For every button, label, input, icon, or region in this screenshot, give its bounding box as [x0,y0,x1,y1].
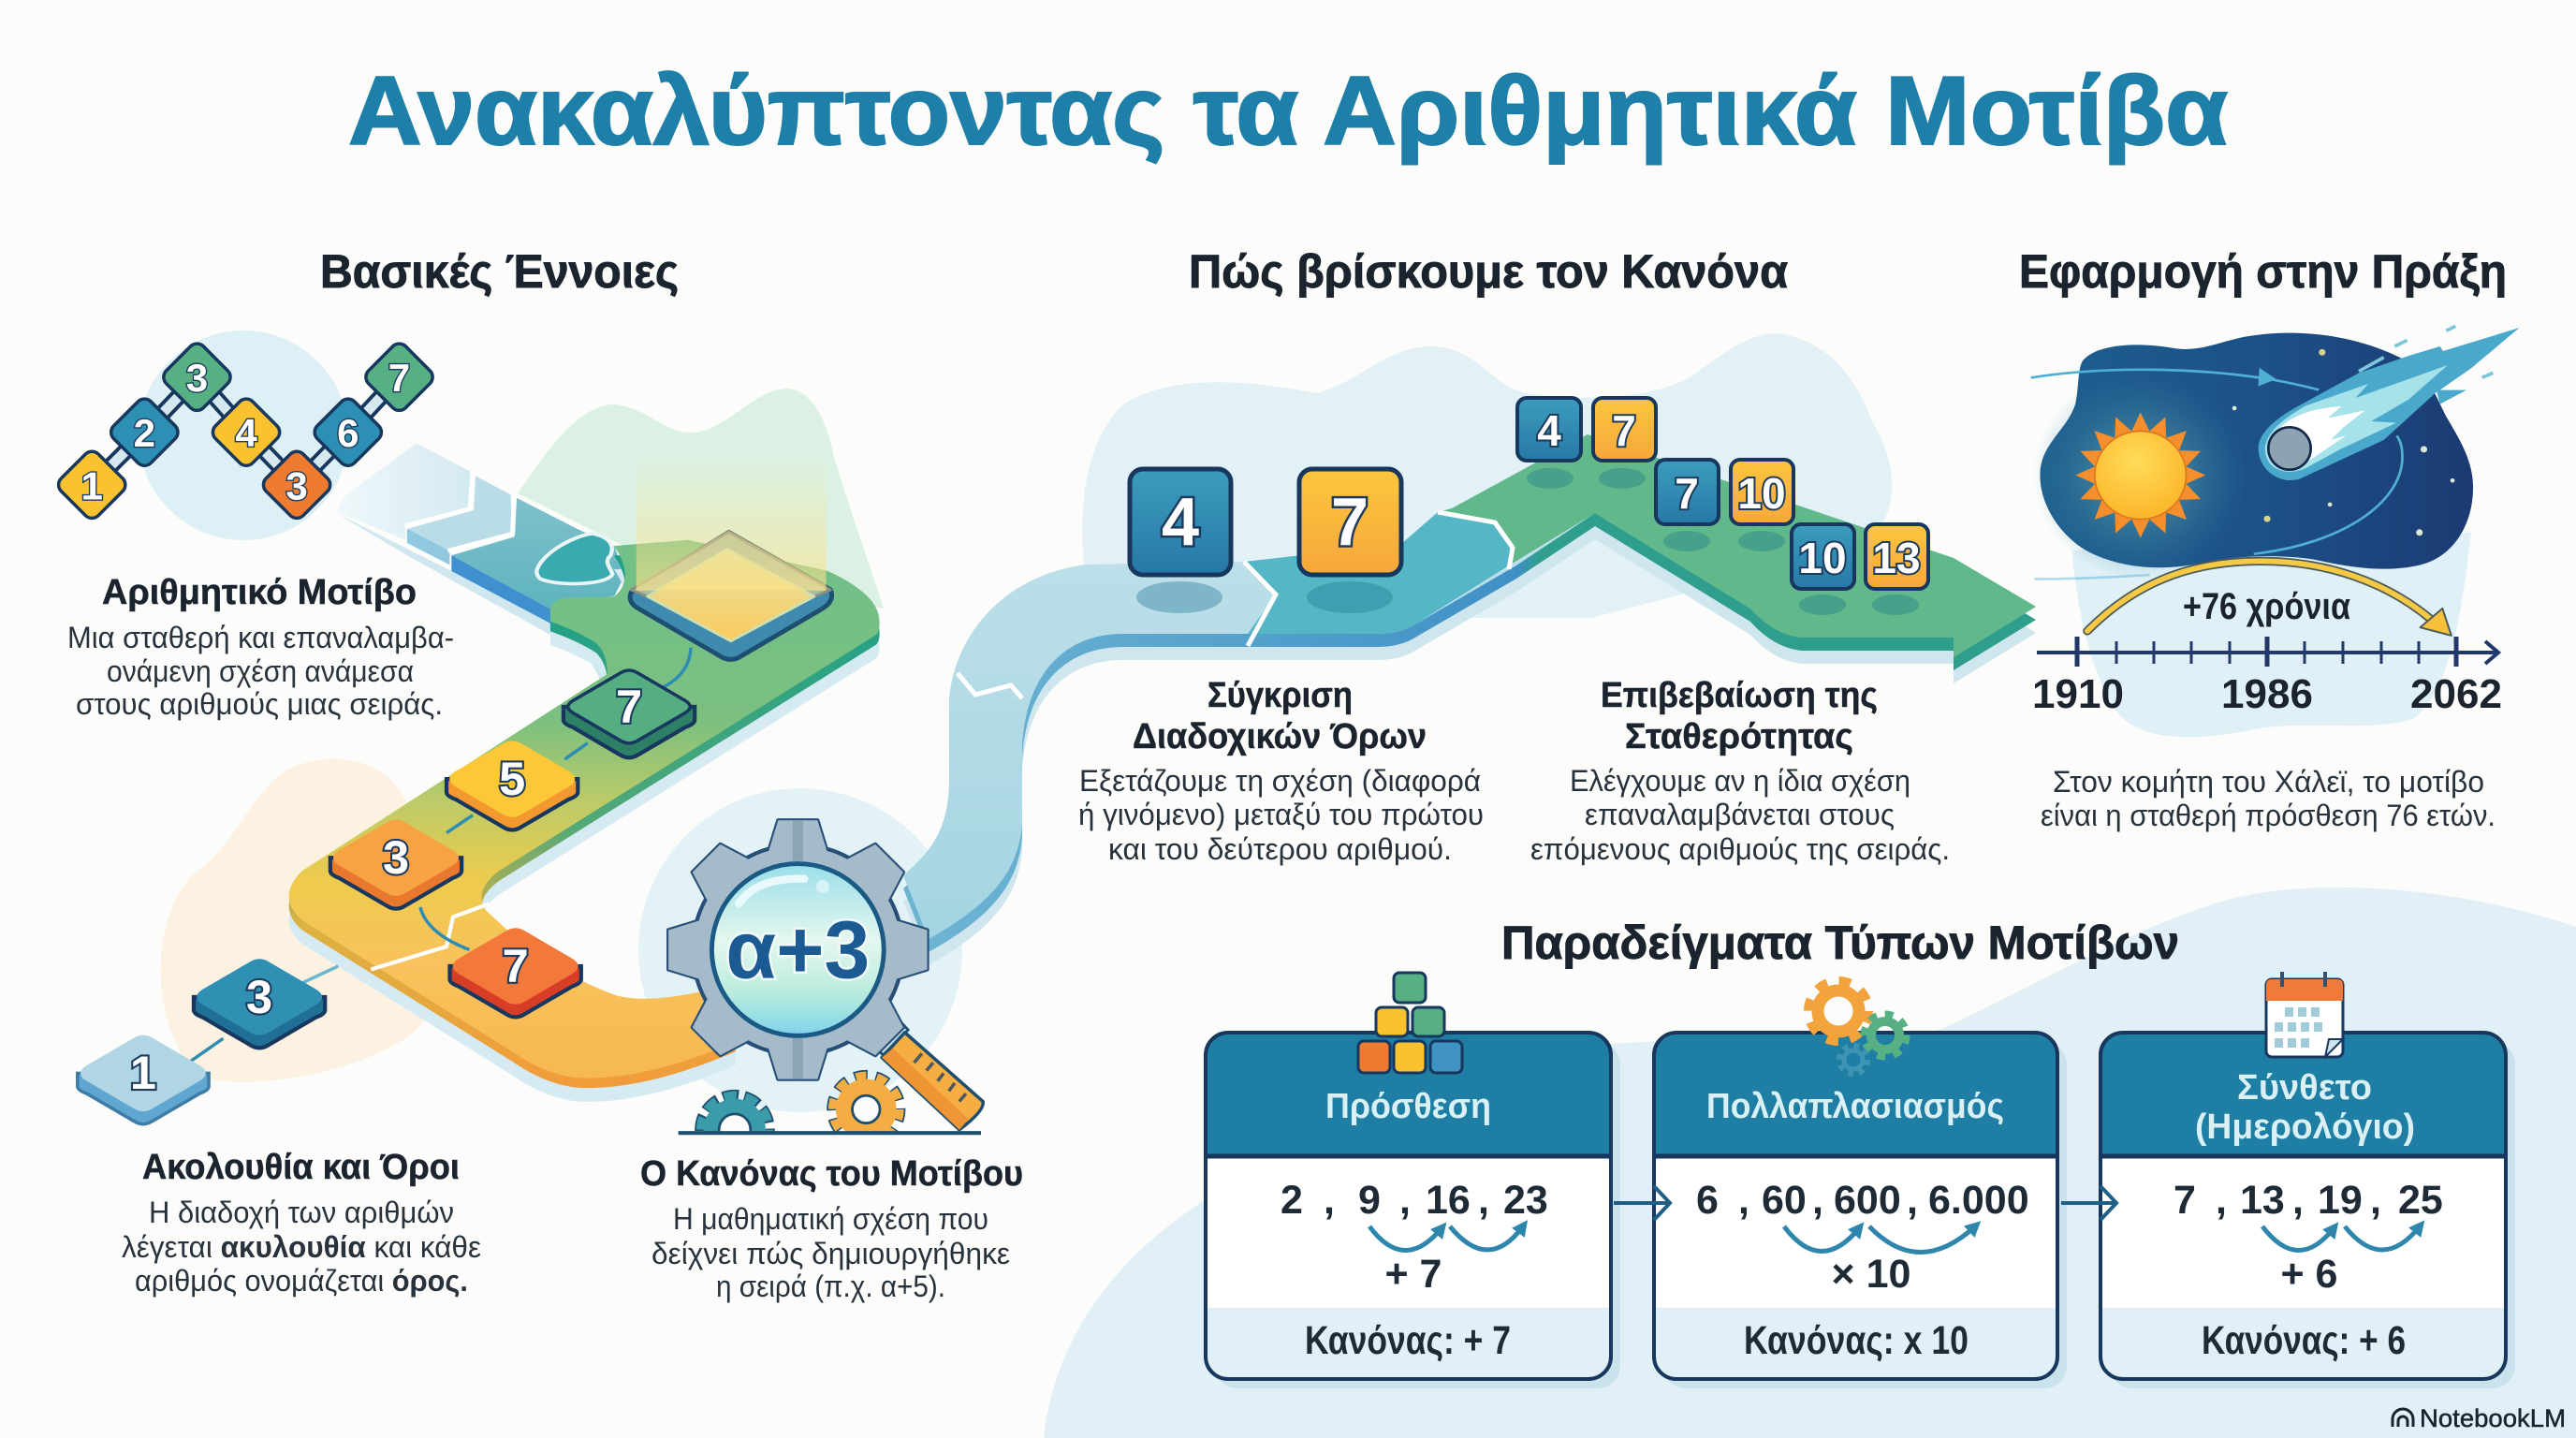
text: sequence and terms: Η διαδοχή των αριθμών [149,1196,454,1229]
text: arithmetic pattern: ονάμενη σχέση ανάμεσα [107,654,414,688]
card: addition: , [1324,1178,1335,1223]
card: addition: Πρόσθεση [1325,1087,1491,1126]
timeline: 2062 [2410,671,2502,717]
card: multiplication: 6.000 [1928,1178,2029,1223]
card: multiplication: 6 [1696,1178,1719,1223]
card: addition: , [1399,1178,1411,1223]
card: composite: 19 [2318,1178,2363,1223]
card: composite: Κανόνας: + 6 [2202,1318,2406,1363]
panel: halley comet illustration [2031,333,2473,737]
tiles: verification rows: 13 [1872,534,1921,582]
tile: orange 3: 3 [383,830,409,884]
text: sequence and terms: Ακολουθία και Όροι [142,1148,460,1187]
text: compare consecutive terms: Εξετάζουμε τη σχέση (διαφορά [1079,764,1481,798]
text: sequence and terms [122,1148,481,1298]
timeline: 1910 [2032,671,2124,717]
heading: application: Εφαρμογή στην Πράξη [2019,245,2507,298]
card: composite: (Ημερολόγιο) [2195,1108,2415,1147]
text: compare consecutive terms: και του δεύτερου αριθμού. [1108,832,1452,866]
text: arithmetic pattern: Αριθμητικό Μοτίβο [102,573,417,612]
card: addition: Κανόνας: + 7 [1305,1318,1511,1363]
tile: light blue 1: 1 [130,1046,156,1099]
tile: yellow 5: 5 [499,752,525,805]
icon: comet [2259,326,2520,480]
path: fading upper strip [337,443,625,681]
stars [2232,349,2454,536]
text: halley's comet [2041,765,2496,832]
tiles: comparison 4 and 7: 4 [1162,485,1199,560]
text: verify consistency: Σταθερότητας [1625,717,1853,756]
tiles: verification rows: 10 [1798,534,1847,582]
tile: yellow 5 [446,742,578,829]
text: arithmetic pattern: στους αριθμούς μιας σειράς. [76,687,443,721]
icon: number chain: 4 [235,411,257,455]
text: verify consistency: επαναλαμβάνεται στους [1585,798,1895,831]
panel: middle background blob [1082,333,1892,618]
blob: green behind target [518,389,884,609]
card: addition: 2 [1281,1178,1303,1223]
card: multiplication [1654,1033,2067,1388]
text: compare consecutive terms: ή γινόμενο) μεταξύ του πρώτου [1078,798,1484,831]
card: multiplication: , [1812,1178,1823,1223]
tile: target [630,532,832,659]
tile: blue 3 [194,961,325,1048]
tiles: comparison 4 and 7 [1130,469,1401,613]
card: composite: , [2370,1178,2381,1223]
blob: blue behind numbers [139,330,348,540]
blob: pale circle behind gear [638,788,962,1112]
text: the rule: Ο Κανόνας του Μοτίβου [640,1154,1023,1194]
text: the rule: η σειρά (π.χ. α+5). [716,1269,945,1303]
card: addition: 9 [1358,1178,1381,1223]
card: composite: 7 [2174,1178,2196,1223]
text: the rule: Η μαθηματική σχέση που [673,1202,988,1236]
card: multiplication: , [1738,1178,1749,1223]
text: verify consistency: Επιβεβαίωση της [1601,676,1878,715]
icon: number chain: 3 [186,356,208,400]
tile: green 7 [564,670,695,757]
tile: red 7 [450,930,581,1017]
heading: basic concepts: Βασικές Έννοιες [320,245,679,298]
card: composite [2100,1033,2515,1388]
text: verify consistency: επόμενους αριθμούς της σειράς. [1530,832,1950,866]
card: addition: + 7 [1385,1252,1442,1297]
tile: red 7: 7 [503,939,529,992]
card: multiplication: × 10 [1832,1252,1910,1297]
text: verify consistency [1530,676,1950,866]
icon: number chain [55,340,436,522]
text: arithmetic pattern: Μια σταθερή και επαναλαμβα- [67,621,454,654]
text: sequence and terms: αριθμός ονομάζεται όρος. [135,1264,468,1298]
icon: number chain: 6 [337,411,359,455]
icon: number chain: 2 [134,411,155,455]
card: addition [1206,1033,1620,1388]
card: multiplication: Κανόνας: x 10 [1744,1318,1969,1363]
icon: number chain: 7 [388,356,410,400]
background blob: bottom right [1044,888,2576,1438]
tile: light blue 1 [78,1036,209,1124]
icon: sun [2075,413,2205,537]
tiles: verification rows: 7 [1675,469,1699,518]
tiles: comparison 4 and 7: 7 [1331,485,1368,560]
card: composite: + 6 [2281,1252,2337,1297]
tile: orange 3 [330,821,461,909]
card: multiplication: 60 [1762,1178,1807,1223]
blob: pale [2071,533,2471,737]
timeline [2032,637,2502,717]
tiles: verification rows: 10 [1737,469,1786,518]
card: multiplication: 600 [1834,1178,1901,1223]
card: composite: , [2216,1178,2227,1223]
card: composite: 13 [2240,1178,2285,1223]
tiles: verification rows: 7 [1612,406,1636,455]
title: Ανακαλύπτοντας τα Αριθμητικά Μοτίβα [348,57,2228,166]
icon: small gears and magnifier [678,1022,985,1135]
icon: gears [1809,982,1906,1074]
card: composite: Σύνθετο [2237,1068,2372,1108]
tiles: verification rows: 4 [1537,406,1561,455]
text: +76 years: +76 χρόνια [2183,586,2350,627]
card: multiplication: , [1907,1178,1918,1223]
text: verify consistency: Ελέγχουμε αν η ίδια σχέση [1570,764,1910,798]
card: addition: , [1478,1178,1489,1223]
card: composite: 25 [2398,1178,2443,1223]
tile: green 7: 7 [616,680,642,733]
arrow: multiplication to composite [2061,1186,2116,1220]
icon: gear with rule [668,820,928,1079]
arc: +76 years [2087,561,2452,636]
card: multiplication: Πολλαπλασιασμός [1706,1087,2004,1126]
text: halley's comet: είναι η σταθερή πρόσθεση 76 ετών. [2041,799,2496,832]
text: sequence and terms: λέγεται ακυλουθία και κάθε [122,1230,481,1264]
tiles: verification rows [1517,398,1928,615]
timeline: 1986 [2221,671,2313,717]
card: addition: 16 [1426,1178,1471,1223]
orbit lines [2031,368,2402,580]
text: compare consecutive terms: Σύγκριση [1208,676,1353,715]
panel: process ribbon [903,434,2036,965]
path: stepped ribbon [289,540,880,1102]
icon: calendar [2266,972,2343,1057]
card: addition: 23 [1503,1178,1548,1223]
text: the rule [640,1154,1023,1303]
blob: orange behind sequence [161,758,423,1082]
text: compare consecutive terms: Διαδοχικών Όρων [1133,717,1427,756]
text: arithmetic pattern [67,573,454,721]
tile: blue 3: 3 [246,970,272,1023]
logo: NotebookLM: NotebookLM [2420,1404,2566,1432]
text: the rule: δείχνει πώς δημιουργήθηκε [651,1237,1010,1270]
panel: left concepts illustration [55,340,983,1163]
text: compare consecutive terms [1078,676,1484,866]
beam above target tile [637,456,826,591]
arrow: addition to multiplication [1614,1186,1670,1220]
icon: number chain: 1 [81,463,103,507]
card: composite: , [2292,1178,2304,1223]
heading: finding the rule: Πώς βρίσκουμε τον Κανόνα [1189,245,1788,298]
icon: blocks [1358,973,1462,1073]
connector lines [190,648,691,1062]
blob: space [2040,333,2473,569]
text: halley's comet: Στον κομήτη του Χάλεϊ, το μοτίβο [2053,765,2484,799]
icon: number chain: 3 [285,463,308,507]
heading: pattern types: Παραδείγματα Τύπων Μοτίβων [1501,917,2179,969]
icon: gear with rule: α+3 [725,904,870,996]
